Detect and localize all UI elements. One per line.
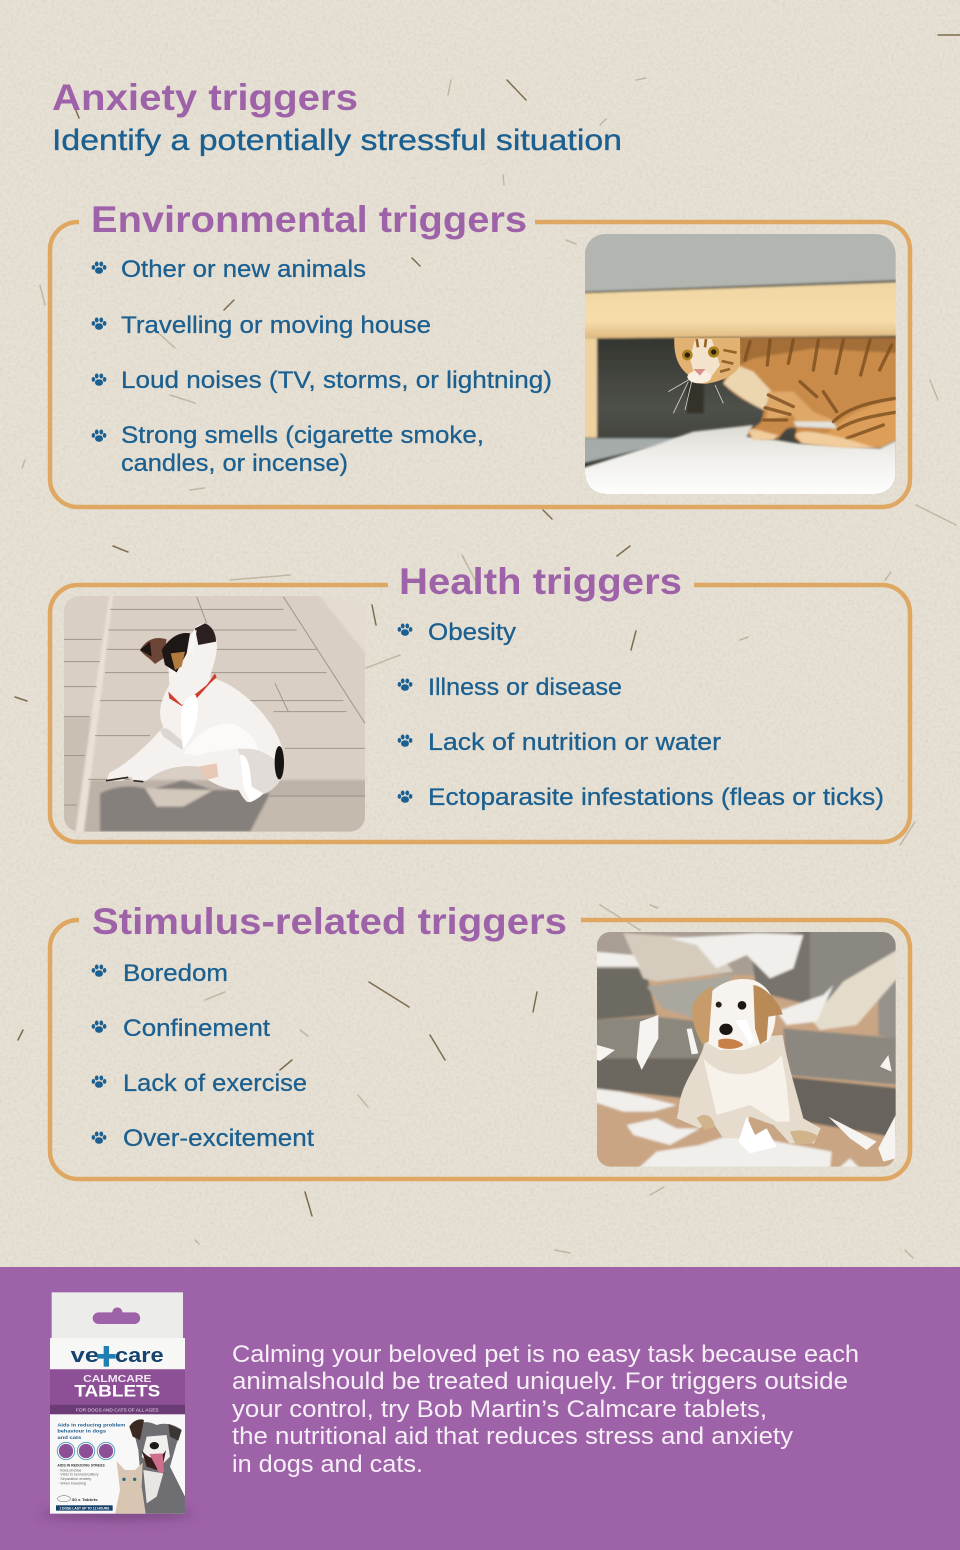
product box: Calmcare tablets: 30 x Tablets	[72, 1497, 99, 1502]
product box: Calmcare tablets: · Noise phobias	[58, 1468, 82, 1472]
list: environmental triggers: candles, or incense)	[121, 450, 348, 477]
list: health triggers: Obesity	[428, 619, 516, 646]
list: environmental triggers: Other or new animals	[121, 256, 366, 283]
product box: Calmcare tablets: and cats	[57, 1435, 82, 1441]
photo: dog scratching	[60, 593, 368, 836]
list: stimulus-related triggers: Boredom	[123, 960, 228, 987]
panel: stimulus-related triggers	[50, 901, 910, 1179]
product box: Calmcare tablets: · Separation anxiety	[58, 1477, 92, 1481]
product box: Calmcare tablets: · When travelling	[58, 1481, 86, 1485]
product box: Calmcare tablets: TABLETS	[74, 1382, 160, 1401]
dog	[677, 979, 821, 1143]
list: stimulus-related triggers: Lack of exercise	[123, 1070, 307, 1097]
pets on box	[115, 1419, 185, 1514]
product box: Calmcare tablets: · Visits to kennels/cattery	[58, 1473, 99, 1477]
list: health triggers	[398, 619, 884, 811]
list: environmental triggers: Loud noises (TV, storms, or lightning)	[121, 367, 552, 394]
product box: Calmcare tablets: 1 DOSE LAST UP TO 12 HOURS	[59, 1506, 110, 1510]
product box: Calmcare tablets: behaviour in dogs	[57, 1429, 106, 1435]
list: stimulus-related triggers: Confinement	[123, 1015, 270, 1042]
list: health triggers: Ectoparasite infestations (fleas or ticks)	[428, 784, 884, 811]
footer band	[0, 1267, 960, 1550]
product box: Calmcare tablets: Aids in reducing problem	[57, 1422, 126, 1428]
footer text: in dogs and cats.	[232, 1451, 423, 1478]
list: health triggers: Illness or disease	[428, 674, 622, 701]
carpet	[582, 425, 900, 498]
list: health triggers: Lack of nutrition or water	[428, 729, 721, 756]
footer text: Calming your beloved pet is no easy task because each	[232, 1341, 859, 1368]
footer text: animalshould be treated uniquely. For triggers outside	[232, 1368, 848, 1395]
footer text: your control, try Bob Martin’s Calmcare tablets,	[232, 1396, 767, 1423]
subtitle: Identify a potentially stressful situation	[52, 124, 622, 157]
product box: Calmcare tablets: CALMCARE	[83, 1374, 152, 1385]
heading: health triggers: Health triggers	[399, 561, 682, 602]
title: Anxiety triggers	[52, 77, 358, 118]
product box: Calmcare tablets: FOR DOGS AND CATS OF ALL AGES	[76, 1407, 159, 1413]
heading: environmental triggers: Environmental triggers	[91, 199, 527, 240]
footer text: the nutritional aid that reduces stress and anxiety	[232, 1423, 793, 1450]
list: stimulus-related triggers: Over-excitement	[123, 1125, 314, 1152]
panel: health triggers	[50, 561, 910, 842]
list: environmental triggers	[92, 256, 552, 477]
panel border	[50, 920, 910, 1179]
panel border	[50, 222, 910, 507]
list: environmental triggers: Strong smells (cigarette smoke,	[121, 422, 484, 449]
list: stimulus-related triggers	[92, 960, 314, 1152]
photo: cat hiding under sofa	[582, 231, 902, 498]
photo: dog among shredded tissue	[593, 928, 900, 1172]
product box: Calmcare tablets: ve	[71, 1344, 99, 1367]
product box: Calmcare tablets: care	[115, 1344, 164, 1367]
dog	[106, 623, 284, 802]
product box: Calmcare tablets: AIDS IN REDUCING STRESS	[57, 1464, 105, 1468]
heading: stimulus-related triggers: Stimulus-related triggers	[92, 901, 567, 942]
product box: Calmcare tablets	[41, 1292, 194, 1519]
cat	[668, 338, 896, 438]
panel border	[50, 585, 910, 842]
panel: environmental triggers	[50, 199, 910, 507]
footer text	[232, 1341, 859, 1478]
list: environmental triggers: Travelling or moving house	[121, 312, 431, 339]
